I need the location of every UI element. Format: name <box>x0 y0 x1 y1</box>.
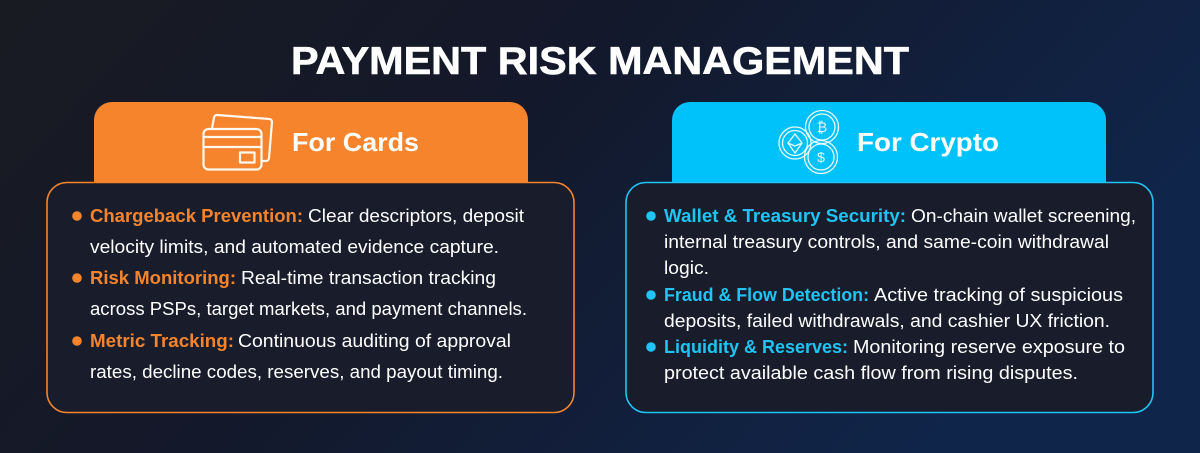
list: crypto bullets: Active tracking of suspicious <box>874 285 1123 305</box>
heading: for cards: For Cards <box>292 127 419 157</box>
list: crypto bullets: protect available cash flow from rising disputes. <box>664 363 1078 383</box>
title: PAYMENT RISK MANAGEMENT <box>291 40 909 83</box>
list: crypto bullets: Liquidity & Reserves: <box>664 337 848 357</box>
list: crypto bullets: On-chain wallet screening, <box>911 206 1136 226</box>
icon: crypto coins: ₿ <box>817 119 827 135</box>
list: cards bullets: Real-time transaction tracking <box>241 268 496 288</box>
list: cards bullets: rates, decline codes, reserves, and payout timing. <box>90 362 503 382</box>
list: cards bullets: Clear descriptors, deposit <box>308 206 524 226</box>
list: crypto bullets: internal treasury controls, and same-coin withdrawal <box>664 232 1109 252</box>
icon: crypto coins <box>779 110 838 174</box>
list: cards bullets: velocity limits, and automated evidence capture. <box>90 237 499 257</box>
header tab: crypto <box>672 102 1106 183</box>
panel: cards <box>47 102 574 412</box>
card: crypto body <box>626 182 1153 412</box>
list: cards bullets: Risk Monitoring: <box>90 268 236 288</box>
list: crypto bullets: Wallet & Treasury Security: <box>664 206 906 226</box>
header tab: cards <box>94 102 528 183</box>
list: cards bullets: across PSPs, target markets, and payment channels. <box>90 299 527 319</box>
icon: credit cards <box>204 115 272 170</box>
list: cards bullets: Chargeback Prevention: <box>90 206 303 226</box>
list: cards bullets: Continuous auditing of approval <box>238 331 511 351</box>
heading: for crypto: For Crypto <box>857 127 999 157</box>
list: crypto bullets: Monitoring reserve exposure to <box>853 337 1125 357</box>
list: cards bullets: Metric Tracking: <box>90 331 234 351</box>
list: crypto bullets <box>646 206 1136 383</box>
card: cards body <box>47 182 574 412</box>
list: crypto bullets: logic. <box>664 258 709 278</box>
list: crypto bullets: deposits, failed withdrawals, and cashier UX friction. <box>664 311 1110 331</box>
panel: crypto <box>626 102 1153 412</box>
icon: crypto coins: $ <box>817 149 825 165</box>
list: crypto bullets: Fraud & Flow Detection: <box>664 285 869 305</box>
list: cards bullets <box>72 206 527 382</box>
